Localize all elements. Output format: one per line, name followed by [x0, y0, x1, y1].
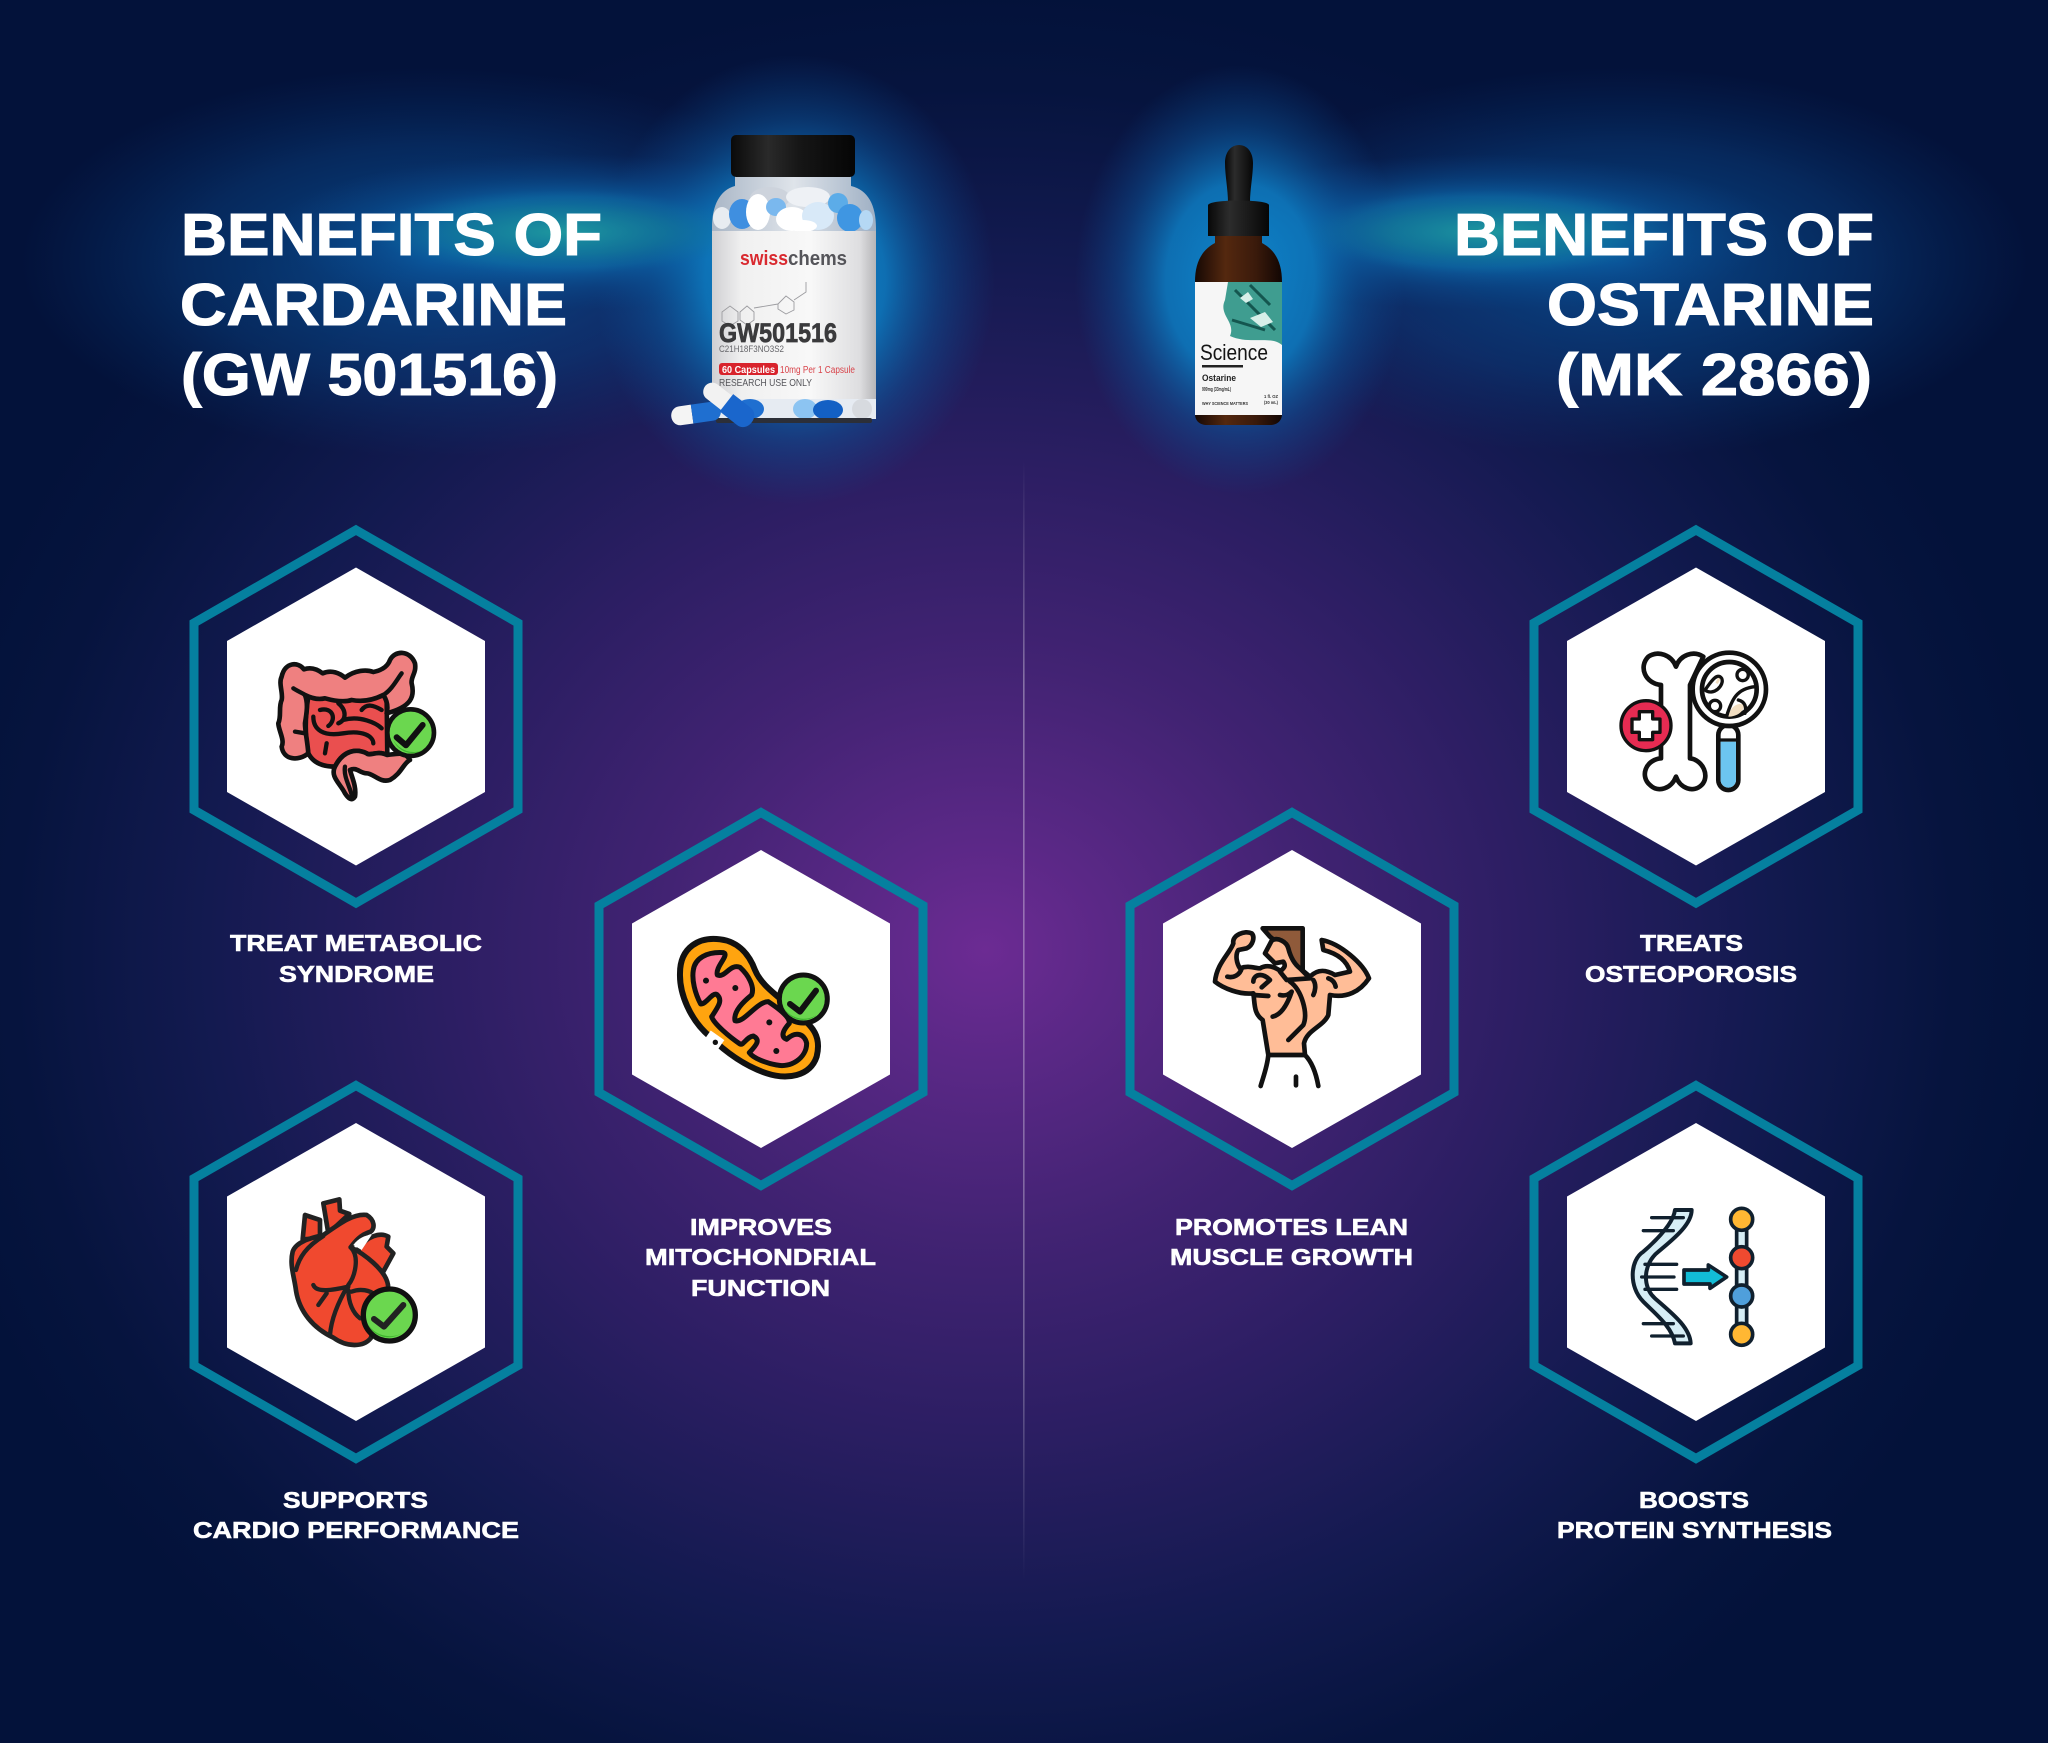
heading: benefits of cardarine [180, 202, 602, 408]
label: PROMOTES LEAN [1175, 1214, 1408, 1240]
dropper collar [1208, 200, 1269, 236]
hexagon badge [1534, 530, 1858, 903]
heading: benefits of ostarine: (MK 2866) [1556, 342, 1872, 408]
label [230, 930, 482, 987]
dropper label: 999mg (33mg/mL) [1202, 387, 1231, 393]
heading: benefits of cardarine: CARDARINE [180, 272, 567, 338]
label: FUNCTION [691, 1275, 830, 1301]
label [1585, 930, 1797, 987]
label: MUSCLE GROWTH [1170, 1244, 1413, 1270]
label: TREAT METABOLIC [230, 930, 482, 956]
hexagon badge [1130, 812, 1454, 1186]
amber glass [1195, 236, 1282, 425]
panel: boosts protein synthesis [1534, 1086, 1858, 1543]
heading: benefits of ostarine [1454, 202, 1874, 408]
label: OSTEOPOROSIS [1585, 961, 1797, 987]
label [645, 1214, 876, 1301]
icon: bone with magnifier [1621, 653, 1766, 790]
panel: supports cardio performance [193, 1086, 519, 1543]
icon: muscular man [1215, 928, 1369, 1086]
heading: benefits of ostarine: BENEFITS OF [1454, 202, 1874, 268]
product label: chems [788, 248, 847, 270]
product label: RESEARCH USE ONLY [719, 377, 812, 389]
dropper bulb [1225, 145, 1253, 202]
product: Ostarine dropper bottle [1195, 145, 1282, 425]
bottle cap [731, 135, 855, 177]
product label: swiss [740, 248, 788, 270]
hexagon badge [1534, 1086, 1858, 1458]
label [1557, 1487, 1832, 1543]
icon: intestines with check [278, 653, 434, 799]
dropper label: (30 mL) [1264, 400, 1278, 405]
label: PROTEIN SYNTHESIS [1557, 1517, 1832, 1543]
product label: 10mg Per 1 Capsule [780, 365, 855, 376]
panel: promotes lean muscle growth [1130, 812, 1454, 1270]
heading: benefits of cardarine: BENEFITS OF [181, 202, 602, 268]
bottle glass with capsules [712, 176, 876, 422]
panel: treats osteoporosis [1534, 530, 1858, 987]
label: IMPROVES [690, 1214, 832, 1240]
icon: DNA to protein chain [1633, 1208, 1753, 1345]
panel: treat metabolic syndrome [194, 530, 518, 987]
panel: improves mitochondrial function [599, 812, 923, 1301]
label: CARDIO PERFORMANCE [193, 1517, 519, 1543]
label: BOOSTS [1639, 1487, 1749, 1513]
label [193, 1487, 519, 1543]
hexagon badge [599, 812, 923, 1186]
product label: 60 Capsules [722, 365, 775, 376]
product: GW501516 capsule bottle [670, 135, 876, 431]
dropper label: WHY SCIENCE MATTERS [1202, 401, 1248, 406]
center divider [1023, 460, 1025, 1580]
icon: mitochondrion with check [680, 939, 827, 1076]
dropper label: 1 fl. OZ [1264, 394, 1278, 399]
bottom capsules [712, 399, 876, 423]
heading: benefits of ostarine: OSTARINE [1547, 272, 1874, 338]
label: SUPPORTS [283, 1487, 428, 1513]
loose capsules [670, 377, 758, 431]
hexagon badge [194, 530, 518, 903]
dropper label: Ostarine [1202, 373, 1236, 384]
icon: heart with check [292, 1199, 415, 1345]
label [1170, 1214, 1413, 1270]
dropper label [1195, 282, 1282, 415]
label: TREATS [1640, 930, 1743, 956]
dropper label: Science [1200, 340, 1268, 365]
label: SYNDROME [279, 961, 434, 987]
label: MITOCHONDRIAL [645, 1244, 876, 1270]
heading: benefits of cardarine: (GW 501516) [181, 342, 558, 408]
hexagon badge [194, 1086, 518, 1458]
product label: C21H18F3NO3S2 [719, 344, 784, 355]
product label: GW501516 [719, 318, 837, 348]
product label [712, 231, 876, 399]
